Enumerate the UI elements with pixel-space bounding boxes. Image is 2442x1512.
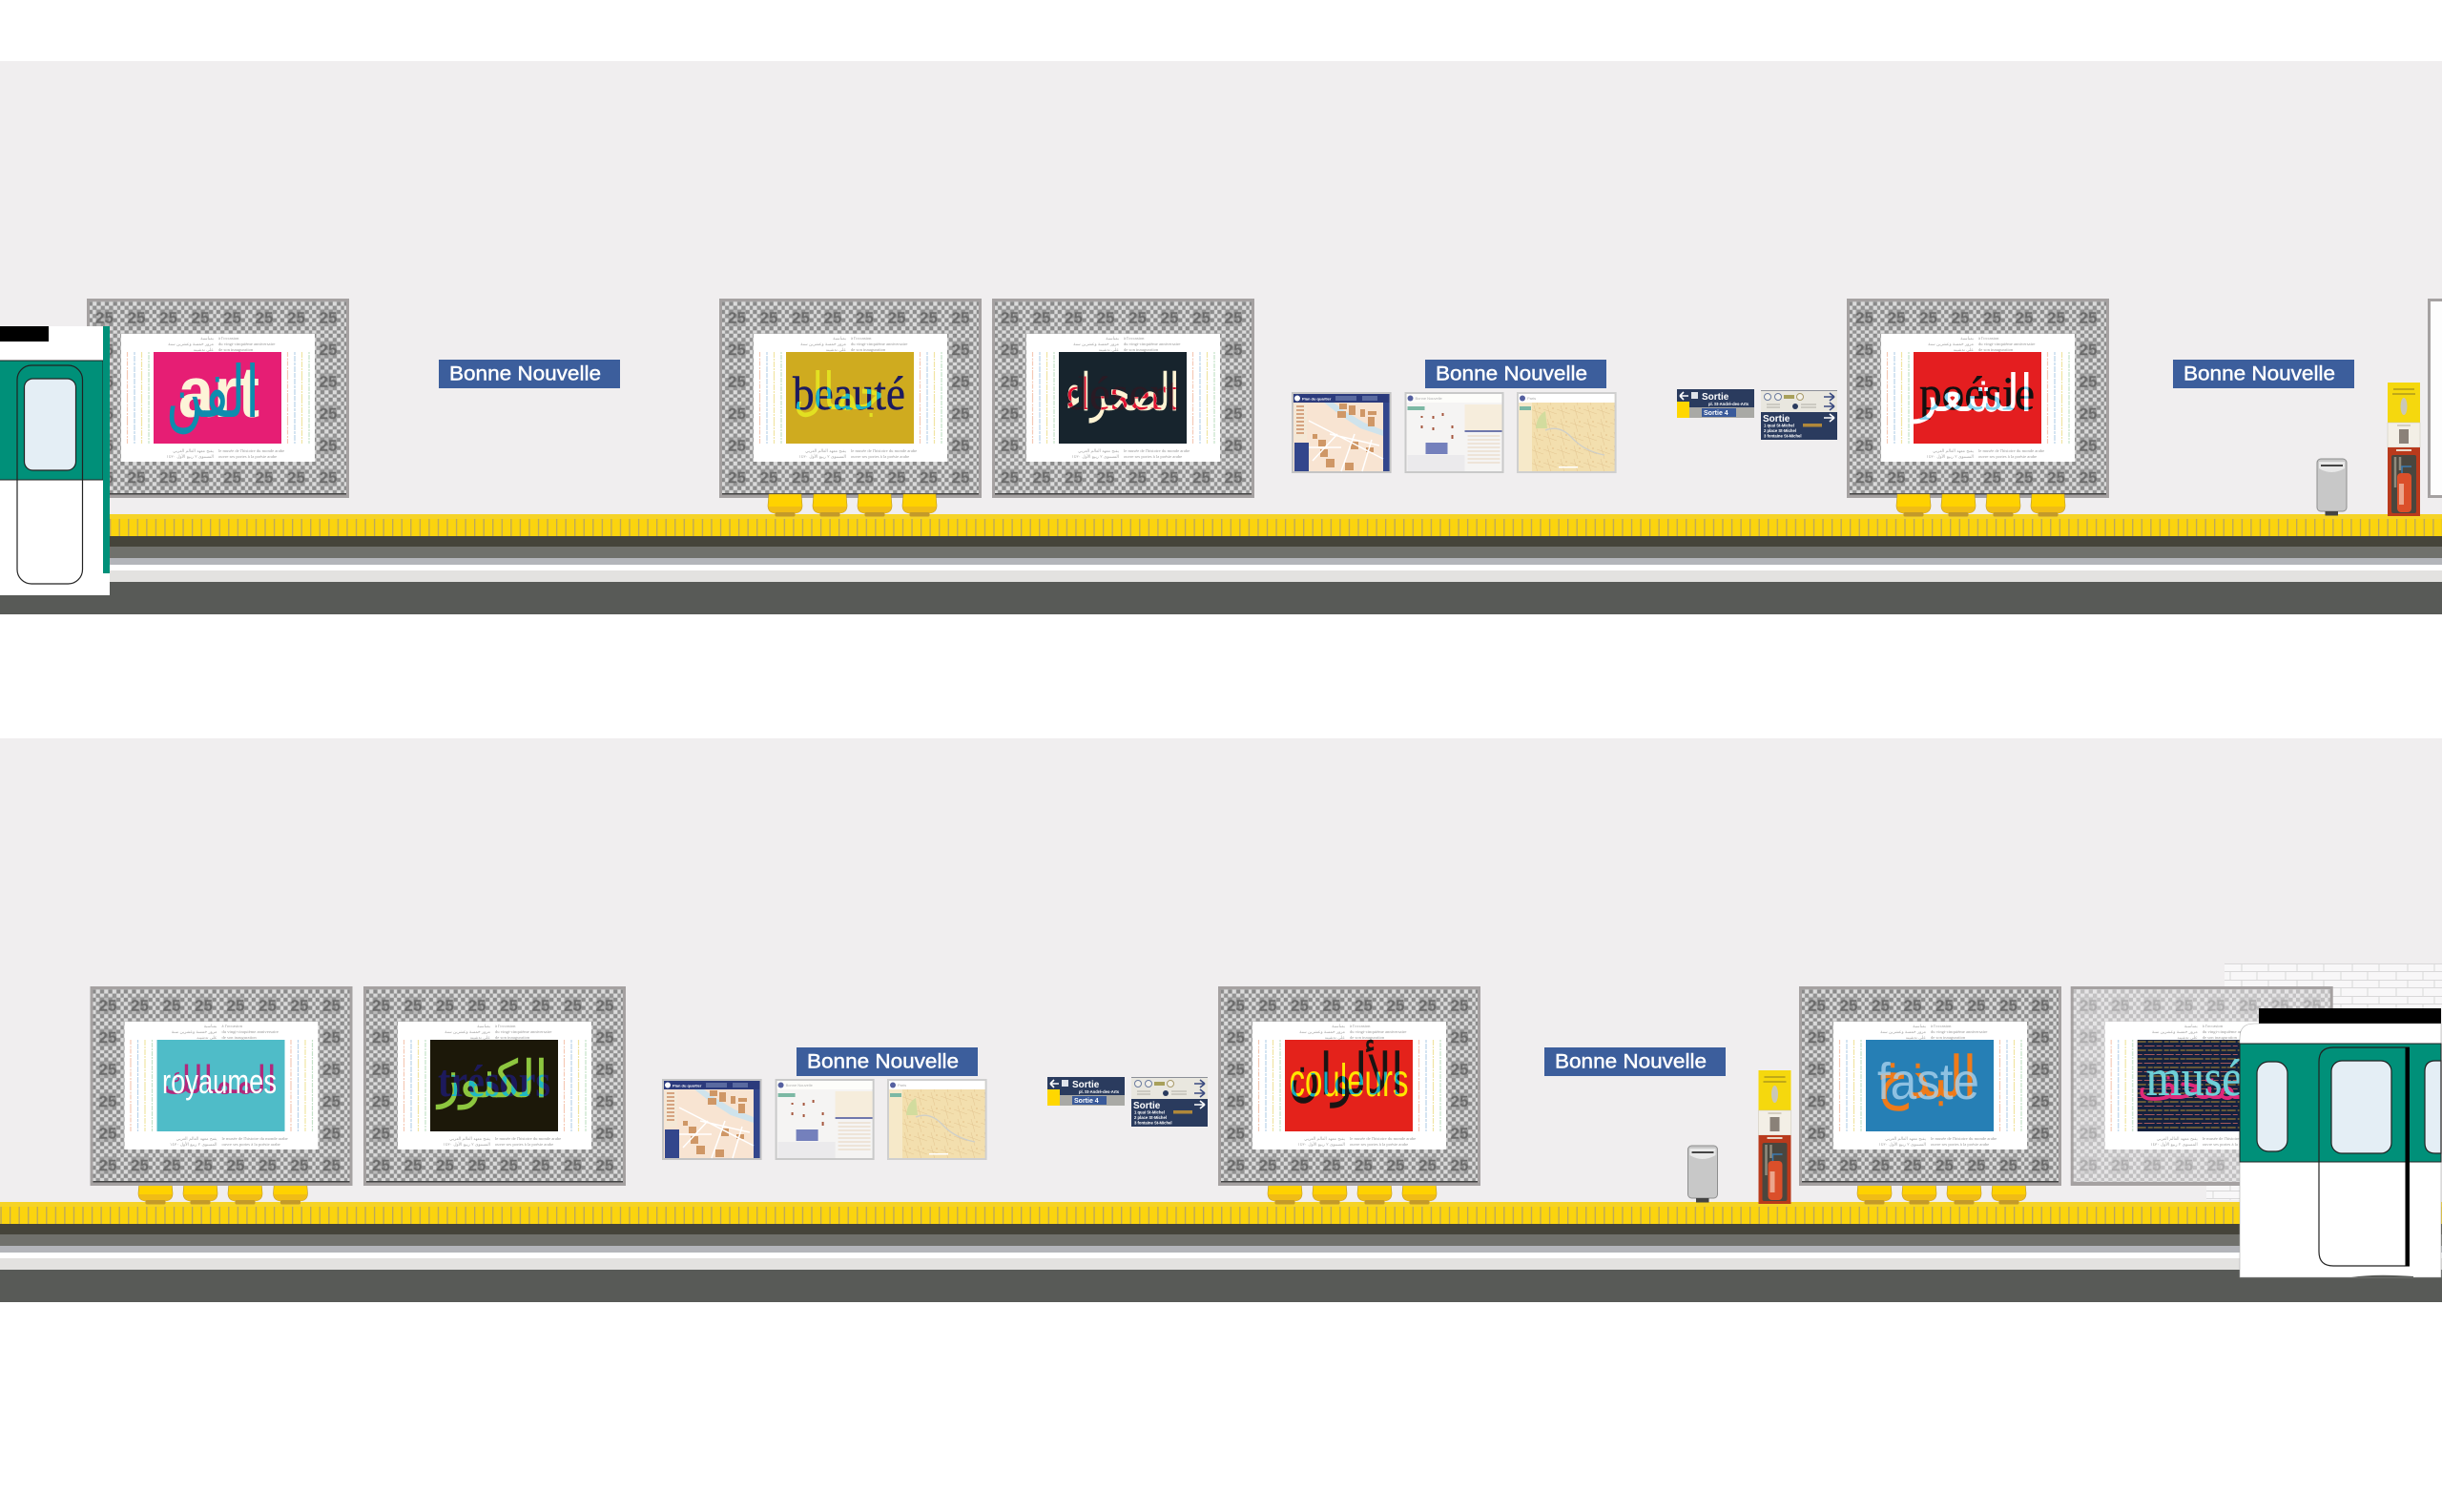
poster captions: ouvre ses portes à la poésie arabe — [1978, 454, 2037, 459]
poster captions: du vingt-cinquième anniversaire — [1978, 342, 2035, 346]
poster captions: à l'occasion — [218, 336, 239, 341]
map: Paris map, top row: Paris — [1527, 396, 1536, 401]
poster captions: يفتح معهد العالم العربي — [449, 1137, 491, 1142]
poster captions: du vingt-cinquième anniversaire — [1124, 342, 1180, 346]
poster word: trésors: trésors — [438, 1056, 550, 1107]
poster word: beauté: جمال — [794, 362, 884, 422]
station sign: Bonne Nouvelle 5 — [1544, 1047, 1726, 1076]
poster captions: المستوى ٢ ربيع الأول ١٤٣٠ — [1927, 453, 1974, 460]
poster captions: المستوى ٢ ربيع الأول ١٤٣٠ — [444, 1141, 490, 1148]
poster captions: de son inauguration — [851, 347, 886, 352]
poster captions: à l'occasion — [495, 1024, 516, 1028]
poster word: beauté: beauté — [793, 366, 905, 420]
seats under couleurs poster — [1268, 1182, 1437, 1204]
poster captions: de son inauguration — [2203, 1035, 2238, 1040]
poster word: faste: faste — [1877, 1053, 1979, 1110]
poster: royaumes — [90, 986, 353, 1186]
poster captions: يفتح معهد العالم العربي — [173, 449, 215, 454]
train: left, top row — [0, 326, 110, 595]
poster captions: المستوى ٢ ربيع الأول ١٤٣٠ — [167, 453, 214, 460]
poster captions: à l'occasion — [851, 336, 872, 341]
poster word: royaumes: royaumes — [162, 1062, 277, 1101]
poster captions: le musée de l'histoire du monde arabe — [1350, 1136, 1416, 1141]
exit sign right, bottom row: 2 place St-Michel — [1134, 1115, 1167, 1120]
poster captions: مرور خمسة وعشرين سنة — [172, 1030, 217, 1035]
poster captions: المستوى ٢ ربيع الأول ١٤٣٠ — [1298, 1141, 1345, 1148]
poster captions: بمناسبة — [200, 337, 214, 342]
map: neighbourhood plan, top row — [1292, 392, 1392, 473]
poster captions: يفتح معهد العالم العربي — [1304, 1137, 1346, 1142]
poster captions: مرور خمسة وعشرين سنة — [1073, 342, 1119, 347]
exit sign left, top row: Sortie — [1702, 392, 1729, 403]
poster captions — [1072, 336, 1190, 460]
seats under beauté poster — [768, 494, 937, 517]
poster captions: le musée de l'histoire du monde arabe — [2203, 1136, 2268, 1141]
platform edge and track bands: bottom row — [0, 1202, 2442, 1302]
train: right, bottom row — [2240, 1008, 2441, 1277]
poster captions: le musée de l'histoire du monde arabe — [1978, 448, 2044, 453]
map: Paris map, top row — [1517, 392, 1617, 473]
exit sign right, bottom row — [1131, 1077, 1208, 1127]
poster captions: المستوى ٢ ربيع الأول ١٤٣٠ — [1879, 1141, 1926, 1148]
bin, top row — [2317, 459, 2347, 515]
exit sign right, bottom row: Sortie — [1133, 1101, 1161, 1111]
poster captions: المستوى ٢ ربيع الأول ١٤٣٠ — [799, 453, 846, 460]
poster captions: à l'occasion — [1978, 336, 1999, 341]
exit sign right, bottom row: 3 fontaine St-Michel — [1134, 1120, 1172, 1126]
map: local area plan, top row: Bonne Nouvelle — [1416, 396, 1443, 401]
poster captions: ouvre ses portes à la poésie arabe — [495, 1142, 553, 1147]
poster captions: de son inauguration — [1350, 1035, 1385, 1040]
poster captions: le musée de l'histoire du monde arabe — [1931, 1136, 1997, 1141]
exit sign left, bottom row: Sortie 4 — [1074, 1098, 1099, 1105]
poster captions: يفتح معهد العالم العربي — [1885, 1137, 1927, 1142]
poster captions: le musée de l'histoire du monde arabe — [851, 448, 917, 453]
poster: poésie — [1847, 299, 2109, 498]
poster: musée (faded) — [2071, 986, 2333, 1186]
station sign: Bonne Nouvelle 4 — [797, 1047, 978, 1076]
poster word: beauté: beauté — [793, 366, 905, 420]
exit sign right, top row: 3 fontaine St-Michel — [1764, 433, 1802, 439]
poster captions: يفتح معهد العالم العربي — [1933, 449, 1975, 454]
poster captions: à l'occasion — [1350, 1024, 1371, 1028]
poster captions: على تدشينه — [826, 348, 846, 353]
station sign: Bonne Nouvelle 3: Bonne Nouvelle — [2183, 362, 2335, 385]
exit sign left, bottom row: Sortie — [1072, 1080, 1100, 1090]
poster word: couleurs: couleurs — [1290, 1056, 1408, 1107]
poster: couleurs — [1218, 986, 1480, 1186]
poster captions: المستوى ٢ ربيع الأول ١٤٣٠ — [2150, 1141, 2198, 1148]
map: neighbourhood plan, top row: Plan du quartier — [1302, 397, 1332, 401]
poster captions: مرور خمسة وعشرين سنة — [1880, 1030, 1926, 1035]
poster captions: بمناسبة — [1913, 1025, 1926, 1029]
map: local area plan, bottom row: Bonne Nouvelle — [786, 1083, 814, 1087]
seats under royaumes poster — [138, 1182, 307, 1204]
poster captions: على تدشينه — [1906, 1036, 1926, 1041]
poster word: poésie: poésie — [1919, 366, 2035, 420]
station sign: Bonne Nouvelle 3 — [2173, 360, 2354, 388]
brick wall patch, low — [2206, 1186, 2245, 1200]
poster captions: على تدشينه — [1954, 348, 1974, 353]
exit sign right, bottom row: 1 quai St-Michel — [1134, 1110, 1165, 1114]
poster: trésors — [363, 986, 626, 1186]
poster word: faste: البذخ — [1877, 1045, 1976, 1111]
poster captions: بمناسبة — [1960, 337, 1974, 342]
poster captions — [2150, 1024, 2268, 1148]
station sign: Bonne Nouvelle 1: Bonne Nouvelle — [449, 362, 601, 385]
poster captions: du vingt-cinquième anniversaire — [2203, 1029, 2259, 1034]
poster word: musée: musée — [2146, 1049, 2263, 1107]
poster captions: de son inauguration — [218, 347, 254, 352]
poster word: musée: المتحف — [2138, 1061, 2262, 1109]
seats under poésie poster — [1896, 494, 2065, 517]
poster captions: à l'occasion — [1931, 1024, 1952, 1028]
poster captions: ouvre ses portes à la poésie arabe — [218, 454, 277, 459]
poster captions: à l'occasion — [2203, 1024, 2224, 1028]
poster word: trésors: trésors — [438, 1056, 550, 1107]
poster captions: على تدشينه — [470, 1036, 490, 1041]
poster captions: à l'occasion — [1124, 336, 1145, 341]
poster captions: بمناسبة — [204, 1025, 217, 1029]
exit sign left, top row — [1677, 389, 1754, 418]
poster captions: de son inauguration — [1931, 1035, 1966, 1040]
poster captions: يفتح معهد العالم العربي — [1078, 449, 1120, 454]
station sign: Bonne Nouvelle 2 — [1425, 360, 1606, 388]
poster word: art: الفن — [166, 350, 259, 434]
poster: désert — [992, 299, 1254, 498]
poster captions: du vingt-cinquième anniversaire — [851, 342, 907, 346]
poster captions: المستوى ٢ ربيع الأول ١٤٣٠ — [170, 1141, 217, 1148]
exit sign right, top row: Sortie — [1763, 414, 1790, 425]
exit sign left, top row: pl. St-André-des-Arts — [1708, 402, 1749, 406]
exit sign right, top row: 1 quai St-Michel — [1764, 424, 1794, 427]
poster captions: de son inauguration — [1978, 347, 2014, 352]
poster captions: du vingt-cinquième anniversaire — [1931, 1029, 1987, 1034]
poster word: poésie: الشعر — [1913, 363, 2033, 424]
poster captions: بمناسبة — [1106, 337, 1119, 342]
poster captions — [799, 336, 917, 460]
poster word: désert: désert — [1066, 366, 1179, 420]
poster captions: à l'occasion — [221, 1024, 243, 1028]
poster captions: يفتح معهد العالم العربي — [2157, 1137, 2198, 1142]
fire extinguisher cabinet, top row — [2388, 383, 2420, 516]
platform wall: top row — [0, 61, 2442, 515]
poster word: désert: الصحراء — [1066, 362, 1179, 423]
poster word: poésie: poésie — [1919, 366, 2035, 420]
poster word: désert: désert — [1066, 366, 1179, 420]
poster captions: مرور خمسة وعشرين سنة — [800, 342, 846, 347]
poster captions: بمناسبة — [1332, 1025, 1345, 1029]
poster captions — [444, 1024, 561, 1148]
poster captions: ouvre ses portes à la poésie arabe — [851, 454, 909, 459]
poster captions: مرور خمسة وعشرين سنة — [168, 342, 214, 347]
poster captions: le musée de l'histoire du monde arabe — [221, 1136, 288, 1141]
poster: beauté — [719, 299, 982, 498]
poster captions: du vingt-cinquième anniversaire — [495, 1029, 551, 1034]
station sign: Bonne Nouvelle 1 — [439, 360, 620, 388]
poster captions: de son inauguration — [495, 1035, 530, 1040]
map: Paris map, bottom row: Paris — [898, 1083, 906, 1087]
poster word: couleurs: الألوان — [1289, 1040, 1403, 1108]
poster captions: ouvre ses portes à la poésie arabe — [1124, 454, 1182, 459]
exit sign right, top row: 2 place St-Michel — [1764, 428, 1796, 433]
brick wall patch, upper right — [2225, 963, 2442, 1009]
exit sign left, bottom row: pl. St-André-des-Arts — [1079, 1089, 1120, 1094]
exit sign left, top row: Sortie 4 — [1704, 410, 1728, 417]
poster captions: يفتح معهد العالم العربي — [805, 449, 847, 454]
poster: art — [87, 299, 349, 498]
poster captions: ouvre ses portes à la poésie arabe — [221, 1142, 280, 1147]
poster word: trésors: الكنوز — [435, 1049, 548, 1109]
poster captions — [1927, 336, 2044, 460]
platform edge and track bands: top row — [0, 514, 2442, 614]
poster captions: بمناسبة — [833, 337, 846, 342]
poster captions: بمناسبة — [477, 1025, 490, 1029]
poster word: couleurs: couleurs — [1290, 1056, 1408, 1107]
map: local area plan, bottom row — [776, 1079, 875, 1160]
poster captions: مرور خمسة وعشرين سنة — [1928, 342, 1974, 347]
poster captions — [170, 1024, 288, 1148]
poster captions — [167, 336, 284, 460]
map: local area plan, top row — [1404, 392, 1503, 473]
poster captions: على تدشينه — [2177, 1036, 2198, 1041]
poster captions: le musée de l'histoire du monde arabe — [1124, 448, 1190, 453]
seats under faste poster — [1857, 1182, 2026, 1204]
map: neighbourhood plan, bottom row: Plan du quartier — [673, 1084, 702, 1087]
bin, bottom row — [1688, 1146, 1717, 1202]
poster captions: على تدشينه — [1325, 1036, 1345, 1041]
poster captions: مرور خمسة وعشرين سنة — [445, 1030, 490, 1035]
platform wall: bottom row — [0, 738, 2442, 1203]
station sign: Bonne Nouvelle 2: Bonne Nouvelle — [1436, 362, 1587, 385]
poster captions: على تدشينه — [1099, 348, 1119, 353]
poster: faste — [1799, 986, 2061, 1186]
poster captions: ouvre ses portes à la poésie arabe — [1350, 1142, 1408, 1147]
poster captions: du vingt-cinquième anniversaire — [1350, 1029, 1406, 1034]
poster captions: du vingt-cinquième anniversaire — [218, 342, 275, 346]
station sign: Bonne Nouvelle 5: Bonne Nouvelle — [1555, 1051, 1707, 1072]
poster captions: du vingt-cinquième anniversaire — [221, 1029, 279, 1034]
poster captions — [1879, 1024, 1997, 1148]
poster captions: على تدشينه — [194, 348, 214, 353]
exit sign right, top row — [1761, 390, 1837, 440]
poster captions: مرور خمسة وعشرين سنة — [1299, 1030, 1345, 1035]
poster captions: مرور خمسة وعشرين سنة — [2152, 1030, 2198, 1035]
fire extinguisher cabinet, bottom row — [1759, 1070, 1791, 1204]
poster captions: de son inauguration — [1124, 347, 1159, 352]
exit sign left, bottom row — [1047, 1077, 1125, 1106]
poster captions: المستوى ٢ ربيع الأول ١٤٣٠ — [1072, 453, 1119, 460]
partial poster frame at right edge — [2429, 300, 2442, 496]
poster captions: de son inauguration — [221, 1035, 257, 1040]
poster captions: le musée de l'histoire du monde arabe — [495, 1136, 561, 1141]
poster word: art: art — [178, 352, 259, 432]
station sign: Bonne Nouvelle 4: Bonne Nouvelle — [807, 1051, 959, 1072]
poster captions: على تدشينه — [197, 1036, 217, 1041]
poster captions: ouvre ses portes à la poésie arabe — [1931, 1142, 1989, 1147]
map: neighbourhood plan, bottom row — [662, 1079, 762, 1160]
map: Paris map, bottom row — [887, 1079, 987, 1160]
poster captions — [1298, 1024, 1416, 1148]
poster captions: يفتح معهد العالم العربي — [176, 1137, 217, 1142]
poster captions: le musée de l'histoire du monde arabe — [218, 448, 284, 453]
poster captions: ouvre ses portes à la poésie arabe — [2203, 1142, 2261, 1147]
poster word: royaumes: الممالك — [162, 1059, 277, 1103]
poster captions: بمناسبة — [2184, 1025, 2198, 1029]
